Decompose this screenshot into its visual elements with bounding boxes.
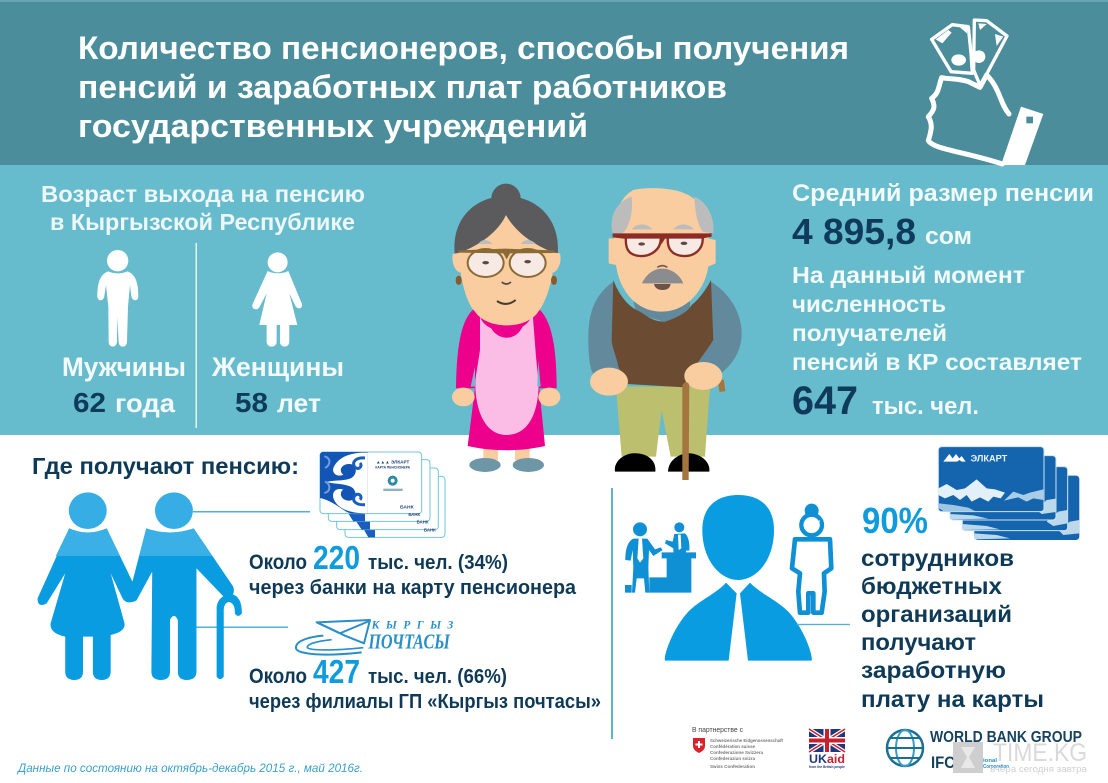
recipients text: пенсий в КР составляет [792,349,1082,375]
partners: Swiss Confederation [692,725,783,769]
bank statistic: Около [249,551,307,574]
retirement age heading [41,181,365,235]
title: пенсий и заработных плат работников [78,69,727,105]
small woman outline [792,504,831,613]
recipients text: На данный момент [792,262,1025,288]
logo: Kyrgyz Pochtasy: КЫРГЫЗ [371,619,454,631]
recipients text: численность [792,291,946,317]
partners: UK aid: UKaid [809,752,845,766]
large employee [665,495,812,661]
bank statistic [249,539,577,599]
post office statistic: тыс. чел. (66%) [368,666,507,688]
partners: World Bank Group and IFC: ional [983,758,998,764]
men age: года [115,388,176,418]
watermark: TIME.KG: TIME.KG [993,739,1087,767]
percent of employees statistic: 90% [862,500,928,541]
employees text: организаций [861,601,1012,627]
partners: Swiss Confederation: Confédération suisse [710,744,755,749]
heading: where pensions are received: Где получают пенсию: [32,453,299,479]
women age [235,387,321,418]
partners: Swiss Confederation: Confederazione Svizzera [710,750,763,755]
partners: Swiss Confederation: Schweizerische Eidgenossenschaft [710,738,783,743]
icon: pension card stack: БАНК [424,527,436,532]
bank statistic: через банки на карту пенсионера [249,577,577,599]
icon: Elcart card stack: ЭЛКАРТ [971,454,1008,464]
icon: pension card stack [320,452,445,537]
average pension value: сом [925,223,972,250]
icon: pension card stack: БАНК [408,512,421,517]
employees text: сотрудников [861,545,1014,571]
title: Количество пенсионеров, способы получения [78,30,849,66]
recipients text: получателей [792,320,947,346]
header band [0,0,1108,165]
bank statistic: тыс. чел. (34%) [368,552,508,574]
partners: World Bank Group and IFC: WORLD BANK GROUP [930,729,1082,746]
average pension value [792,211,972,252]
logo: Kyrgyz Pochtasy: ПОЧТАСЫ [368,631,451,653]
recipients value: 647 [792,379,858,423]
title: государственных учреждений [78,108,588,144]
retirement age heading: в Кыргызской Республике [50,209,355,235]
icon: woman [252,252,302,347]
partners: Swiss Confederation: Confederaziun svizra [710,756,755,761]
icon: hand holding money [928,20,1043,165]
icon: elderly couple [38,492,242,680]
partners: UK aid: from the British people [809,765,845,769]
post office statistic: Около [249,665,307,688]
retirement age heading: Возраст выхода на пенсию [41,181,365,207]
panel: average pension [792,180,1094,423]
icon: man [97,250,138,347]
partners: World Bank Group and IFC: Corporation [983,764,1009,770]
employees text: плату на карты [861,686,1044,712]
footnote: Данные по состоянию на октябрь-декабрь 2015 г., май 2016г. [16,763,363,775]
panel: retirement age [41,181,365,428]
logo: Kyrgyz Pochtasy [296,619,454,655]
icon: Elcart card stack [938,447,1079,540]
post office statistic [249,653,601,713]
employees text: заработную [861,657,1006,683]
women age: лет [277,388,321,418]
icon: pension card stack: КАРТА ПЕНСИОНЕРА [375,465,411,469]
recipients value [792,379,979,423]
average pension value: 4 895,8 [792,211,916,252]
icon: pension card stack: БАНК [400,505,415,511]
post office statistic: через филиалы ГП «Кыргыз почтасы» [249,691,601,713]
icon: employee silhouettes [625,495,850,661]
title [78,30,849,144]
men age: 62 [73,387,106,418]
employees text: получают [861,629,976,655]
partners: World Bank Group and IFC [887,729,1082,772]
recipients value: тыс. чел. [872,393,979,420]
employees text [861,545,1044,712]
women age: 58 [235,387,268,418]
recipients text [792,262,1082,375]
average pension heading: Средний размер пенсии [792,180,1094,207]
connector lines [193,511,310,628]
bank statistic: 220 [313,539,360,576]
men age [73,387,176,418]
partners: World Bank Group and IFC: IFC [931,753,955,772]
partners: Swiss Confederation: В партнерстве с [692,725,743,734]
watermark: TIME.KG [953,739,1087,774]
illustration: elderly woman [452,184,561,472]
post office statistic: 427 [313,653,360,690]
icon: pension card stack: БАНК [417,520,429,525]
men label: Мужчины [62,352,186,382]
partners: UK aid [809,729,845,769]
middle band [0,165,1108,435]
watermark: TIME.KG: вчера сегодня завтра [990,764,1087,774]
illustration: elderly man [588,188,742,480]
icon: pension card stack: ▲▲▲ ЭЛКАРТ [376,460,410,465]
partners: Swiss Confederation: Swiss Confederation [710,764,755,769]
women label: Женщины [211,352,344,382]
small workers on podium [625,522,696,593]
employees text: бюджетных [861,573,1002,599]
